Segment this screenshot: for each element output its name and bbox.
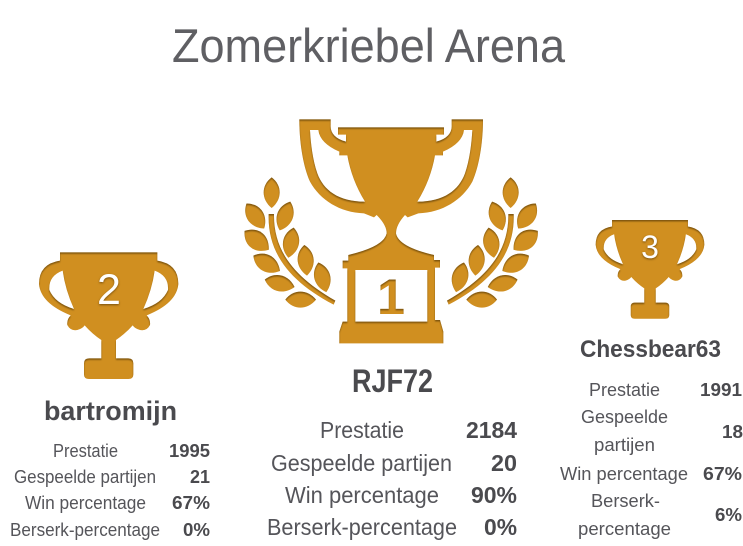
stats table: bartromijn: Berserk-percentage: [10, 520, 160, 540]
stats table: RJF72: [267, 417, 517, 540]
stats table: Chessbear63: Gespeelde: [581, 407, 668, 427]
stats table: RJF72: 20: [491, 450, 517, 476]
stats table: RJF72: Prestatie: [320, 417, 404, 443]
stats table: Chessbear63: partijen: [594, 435, 655, 455]
stats table: bartromijn: Prestatie: [53, 441, 118, 461]
player name: bartromijn: bartromijn: [44, 396, 177, 426]
stats table: RJF72: Berserk-percentage: [267, 514, 457, 540]
stats table: Chessbear63: 67%: [703, 464, 742, 484]
stats table: RJF72: 90%: [471, 482, 517, 508]
stats table: bartromijn: 67%: [172, 493, 210, 513]
stats table: RJF72: Win percentage: [285, 482, 439, 508]
icon: main trophy shape: [299, 119, 483, 343]
stats table: Chessbear63: 6%: [715, 505, 742, 525]
stats table: bartromijn: Gespeelde partijen: [14, 467, 156, 487]
stats table: bartromijn: 1995: [169, 441, 210, 461]
icon: left laurel: [239, 177, 335, 308]
stats table: RJF72: 2184: [466, 417, 517, 443]
number 1: 1: [377, 269, 405, 325]
stats table: Chessbear63: percentage: [578, 519, 671, 539]
stats table: Chessbear63: Win percentage: [560, 464, 688, 484]
icon: second place trophy: [39, 252, 178, 379]
stats table: Chessbear63: 1991: [700, 380, 742, 400]
stats table: Chessbear63: [560, 380, 743, 539]
icon: right laurel: [447, 177, 543, 308]
stats table: Chessbear63: Prestatie: [589, 380, 660, 400]
stats table: bartromijn: 21: [190, 467, 210, 487]
stats table: RJF72: Gespeelde partijen: [271, 450, 452, 476]
stats table: Chessbear63: 18: [722, 422, 743, 442]
player name: RJF72: RJF72: [352, 363, 433, 399]
stats table: bartromijn: Win percentage: [25, 493, 146, 513]
title: Zomerkriebel Arena: [172, 19, 566, 72]
stats table: bartromijn: [10, 441, 210, 540]
stats table: bartromijn: 0%: [183, 520, 210, 540]
player name: Chessbear63: Chessbear63: [580, 336, 721, 363]
number 3: 3: [641, 229, 659, 265]
number 2: 2: [97, 266, 121, 314]
stats table: RJF72: 0%: [484, 514, 517, 540]
icon: third place trophy: [596, 220, 704, 319]
icon: first place trophy with laurels: [239, 119, 543, 343]
stats table: Chessbear63: Berserk-: [591, 491, 660, 511]
